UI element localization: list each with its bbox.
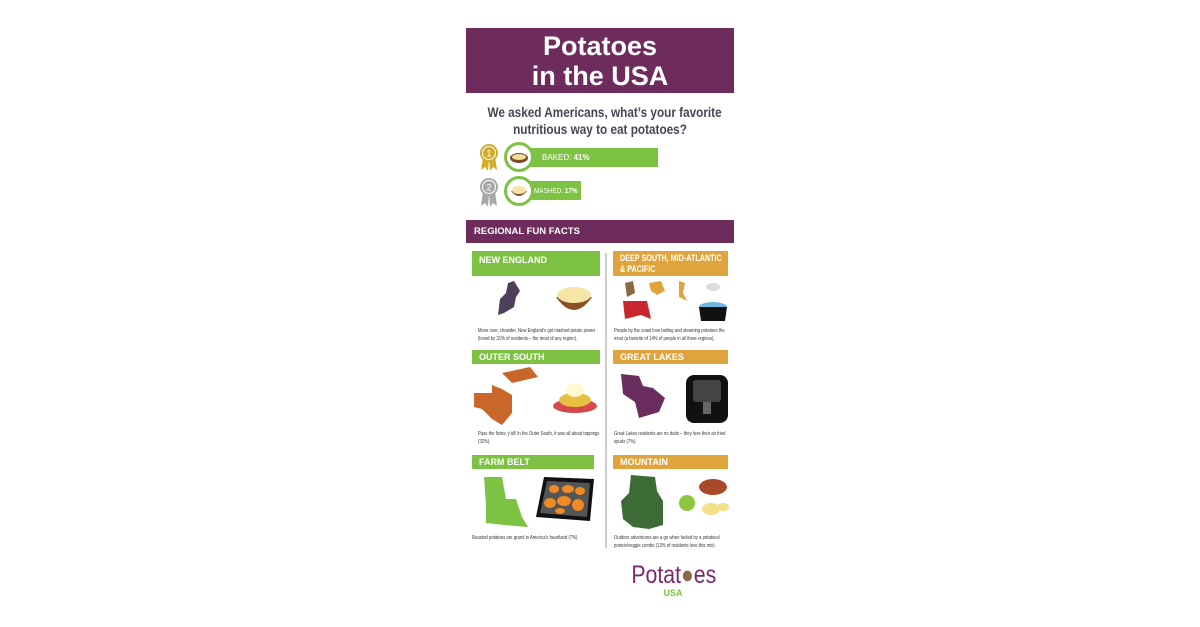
panel: farm belt: FARM BELT bbox=[479, 457, 530, 467]
panel: new england: Move over, chowder, New England's got mashed potato power bbox=[478, 328, 595, 334]
panel: deep south: most (a favorite of 14% of people in all three regions). bbox=[614, 336, 715, 342]
panel: new england bbox=[472, 251, 600, 342]
icon: silver medal: 2 bbox=[486, 182, 492, 192]
bar: baked bbox=[480, 142, 658, 172]
panel: mountain bbox=[613, 455, 729, 549]
panel: outer south: OUTER SOUTH bbox=[479, 352, 545, 362]
panel: farm belt bbox=[472, 455, 594, 541]
icon: roasted potatoes tray bbox=[536, 477, 594, 521]
icon: air fryer bbox=[686, 375, 728, 423]
icon: great lakes map bbox=[621, 374, 665, 418]
panel: new england: NEW ENGLAND bbox=[479, 255, 547, 265]
panel: great lakes: GREAT LAKES bbox=[620, 352, 684, 362]
section header: regional fun facts bbox=[466, 220, 734, 243]
question bbox=[487, 104, 722, 137]
panel: great lakes: spuds (7%). bbox=[614, 439, 637, 445]
icon: texas map bbox=[474, 367, 538, 425]
panel: deep south: People by the coast love boiling and steaming potatoes the bbox=[614, 328, 725, 334]
section header: regional fun facts: REGIONAL FUN FACTS bbox=[474, 226, 580, 237]
logo: Potat●es bbox=[631, 561, 716, 589]
icon: mashed bowl bbox=[504, 176, 531, 206]
question: We asked Americans, what’s your favorite bbox=[487, 104, 722, 120]
panel: deep south: DEEP SOUTH, MID-ATLANTIC bbox=[620, 253, 722, 263]
panel: outer south: (32%). bbox=[478, 439, 490, 445]
bar: baked: BAKED: 41% bbox=[542, 153, 590, 162]
icon: baked potato bbox=[504, 142, 531, 172]
bar: mashed: MASHED: 17% bbox=[534, 186, 578, 195]
panel: farm belt: Roasted potatoes are grand in America's heartland (7%). bbox=[472, 535, 579, 541]
icon: gold medal bbox=[480, 144, 498, 171]
logo: USA bbox=[663, 588, 682, 598]
icon: farm belt map bbox=[484, 477, 528, 527]
panel: outer south: Pass the fixins, y'all! In the Outer South, it was all about toppings bbox=[478, 431, 599, 437]
icon: loaded fries bbox=[553, 383, 597, 413]
question: nutritious way to eat potatoes? bbox=[513, 121, 687, 137]
title bbox=[466, 28, 734, 93]
icon: new england map bbox=[498, 281, 520, 315]
panel: deep south: & PACIFIC bbox=[620, 264, 655, 274]
panel: mountain: MOUNTAIN bbox=[620, 457, 668, 467]
panel: outer south bbox=[472, 350, 600, 445]
icon: mashed bowl bbox=[556, 287, 592, 310]
panel: mountain: protein/veggie combo (13% of residents love this mix). bbox=[614, 543, 716, 549]
icon: silver medal bbox=[480, 178, 498, 207]
title: Potatoes bbox=[543, 31, 657, 61]
bar: mashed bbox=[480, 176, 581, 207]
icon: steak, broccoli, potatoes bbox=[679, 479, 729, 515]
panel: mountain: Outdoor adventures are a go when fueled by a potatoes/ bbox=[614, 535, 720, 541]
panel: deep south bbox=[613, 251, 728, 342]
icon: region maps bbox=[623, 281, 727, 321]
icon: gold medal: 1 bbox=[486, 148, 492, 158]
title: in the USA bbox=[532, 61, 668, 91]
panel: great lakes bbox=[613, 350, 728, 445]
icon: mountain map bbox=[621, 475, 663, 529]
panel: great lakes: Great Lakes residents are no duds – they love their air fried bbox=[614, 431, 725, 437]
panel: new england: (loved by 31% of residents – the most of any region). bbox=[478, 336, 577, 342]
